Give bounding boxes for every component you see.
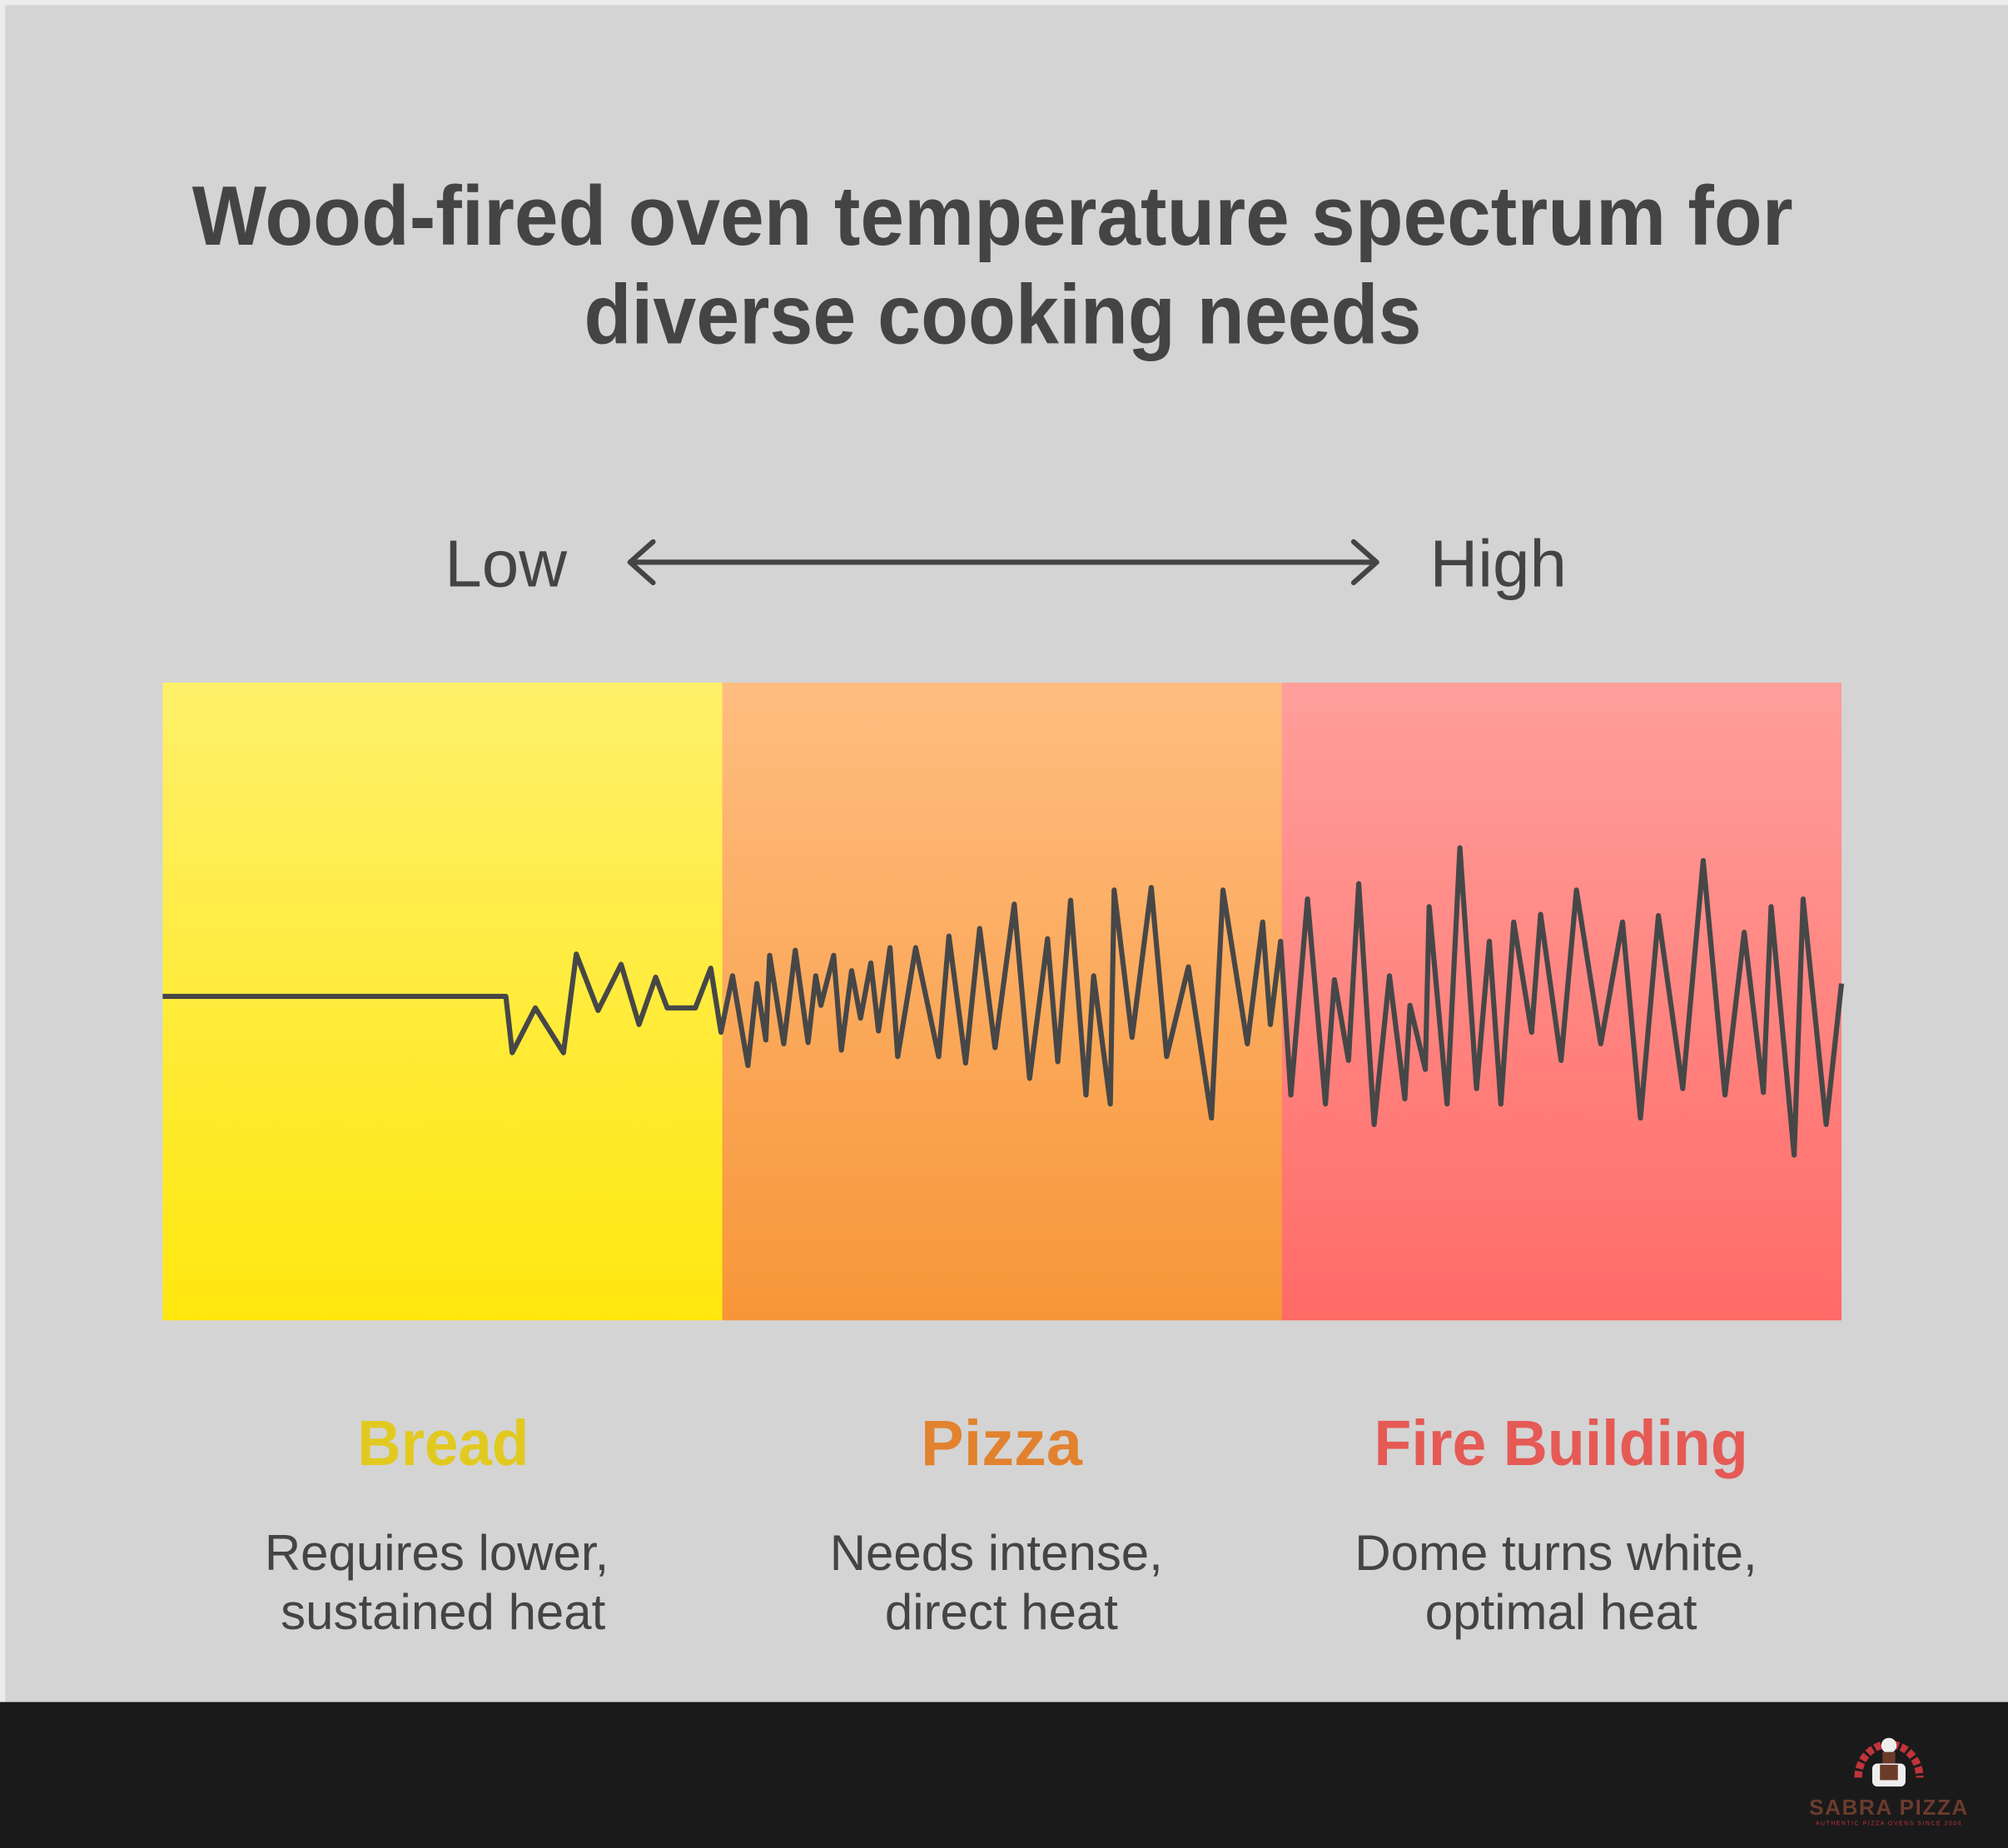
band: fire building (high) [1282,683,1841,1320]
band: pizza (medium) [723,683,1283,1320]
logo: Sabra Pizza: AUTHENTIC PIZZA OVENS SINCE 2004 [1816,1821,1962,1826]
spectrum bands [162,683,1841,1320]
description: bread: sustained heat [281,1584,606,1640]
title: diverse cooking needs [584,266,1421,361]
description: bread [265,1525,609,1640]
waveform line [162,847,1841,1155]
logo: Sabra Pizza [1809,1738,1969,1826]
label: Pizza: Pizza [921,1408,1083,1479]
description: fire building [1354,1525,1757,1640]
label: Bread [265,1408,609,1640]
footer bar [0,1702,2008,1848]
label: Pizza [830,1408,1163,1640]
description: fire building: Dome turns white, [1354,1525,1757,1581]
title: Wood-fired oven temperature spectrum for [192,168,1793,263]
label: Fire Building [1354,1408,1757,1640]
description: bread: Requires lower, [265,1525,609,1581]
description: pizza: Needs intense, [830,1525,1163,1581]
scale label: Low: Low [445,527,567,601]
label: Bread: Bread [357,1408,529,1479]
label: Fire Building: Fire Building [1374,1408,1748,1479]
description: pizza: direct heat [885,1584,1118,1640]
scale label: High: High [1430,527,1567,601]
band: bread (low) [162,683,723,1320]
description: fire building: optimal heat [1425,1584,1697,1640]
logo: Sabra Pizza: SABRA PIZZA [1809,1795,1969,1820]
description: pizza [830,1525,1163,1640]
arrow: low to high [630,542,1377,583]
title [192,168,1793,361]
